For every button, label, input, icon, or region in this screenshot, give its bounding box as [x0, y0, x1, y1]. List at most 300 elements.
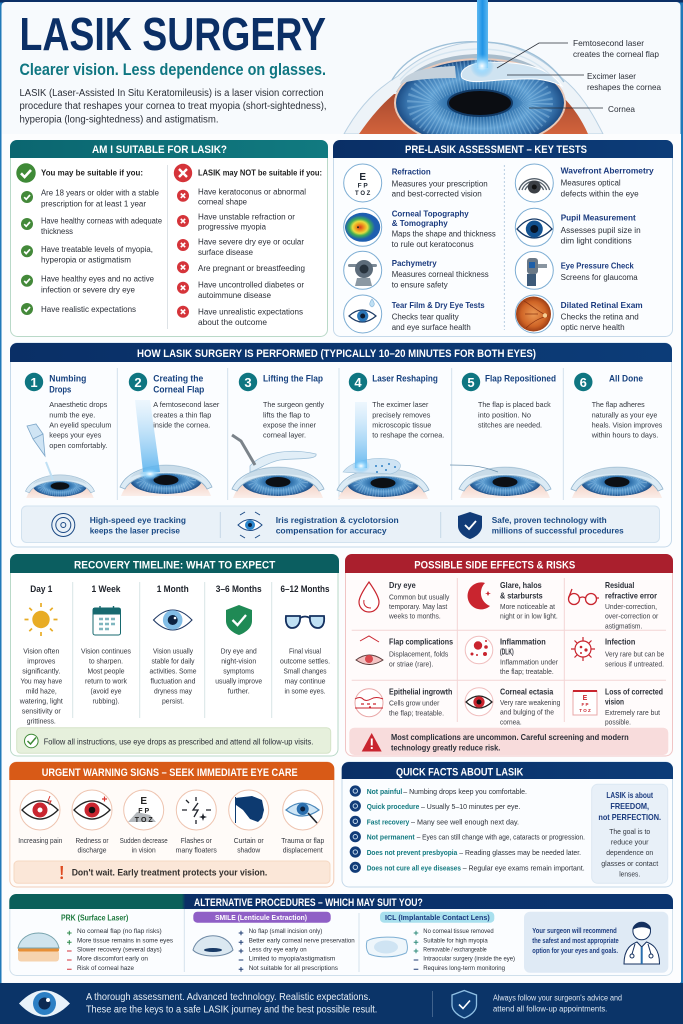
risk: corneal ectasia: [465, 688, 560, 726]
column: 6-12 months: [280, 583, 330, 696]
column: 1 week: 1 Week: [92, 583, 121, 594]
hero illustration: eye with laser: [344, 0, 603, 148]
step 3: corneal layer.: [263, 431, 306, 440]
fact list: Does not cure all eye diseases: [367, 863, 461, 872]
test text: left column: Measures corneal thickness: [392, 270, 489, 279]
heading: PRE-LASIK ASSESSMENT – KEY TESTS: [405, 144, 587, 156]
risk: inflammation: Inflammation under: [500, 657, 558, 666]
sign: redness: Redness or: [76, 836, 109, 845]
risk: loss of corrected vision: vision: [605, 697, 624, 706]
fact list: Not permanent: [367, 833, 415, 842]
callout: surgeon recommendation: the safest and most appropriate: [532, 936, 619, 945]
column: suitable: You may be suitable if you:: [41, 168, 143, 178]
test text: right column: Assesses pupil size in: [561, 226, 641, 235]
fact list: [350, 785, 585, 873]
test text: right column: optic nerve health: [561, 323, 625, 332]
step 3: Lifting the Flap: [263, 372, 323, 384]
title: LASIK SURGERY: [20, 8, 326, 60]
procedure: ICL: No corneal tissue removed: [423, 928, 494, 935]
step 6: The flap adheres: [592, 400, 645, 409]
sign: trauma: Trauma or flap: [281, 836, 324, 845]
procedure: ICL: Removable / exchangeable: [423, 946, 487, 954]
footer message: [86, 992, 377, 1016]
eye illustration: [120, 464, 212, 496]
icon: doctor: [624, 922, 660, 964]
procedure: SMILE: Less dry eye early on: [249, 946, 307, 954]
feature band: compensation for accuracy: [276, 526, 387, 536]
column: not suitable: Are pregnant or breastfeeding: [198, 264, 305, 273]
hero annotations: [497, 39, 661, 114]
eye illustration: [26, 474, 94, 498]
icon: target: [52, 514, 75, 536]
panel: am I suitable: [10, 140, 328, 336]
risk: loss of corrected vision: possible.: [605, 718, 631, 727]
column: day 1: mild haze,: [26, 687, 57, 696]
heading: URGENT WARNING SIGNS – SEEK IMMEDIATE EYE CARE: [42, 767, 298, 779]
hero annotations: Femtosecond laser: [573, 39, 644, 48]
risk: loss of corrected vision: Extremely rare but: [605, 708, 661, 717]
fact list: – Numbing drops keep you comfortable.: [403, 787, 527, 796]
sign: decreased vision: E: [140, 796, 147, 807]
footer note: attend all follow-up appointments.: [493, 1004, 607, 1013]
column: suitable: infection or severe dry eye: [41, 285, 136, 294]
hero annotations: Cornea: [608, 105, 635, 114]
sign: flashes: Flashes or: [181, 836, 212, 845]
procedure: SMILE: No flap (small incision only): [249, 928, 322, 935]
callout: complications note: [349, 728, 668, 755]
hero annotations: creates the corneal flap: [573, 50, 659, 59]
panel: recovery timeline: [10, 554, 339, 756]
icon: eye chart: [344, 164, 382, 202]
procedure: PRK: Slower recovery (several days): [77, 946, 162, 954]
step 6: All Done: [609, 372, 643, 384]
step 1: An eyelid speculum: [49, 420, 111, 429]
column: day 1: improves: [27, 657, 56, 666]
column: day 1: [19, 583, 63, 726]
test text: left column: Tear Film & Dry Eye Tests: [392, 301, 485, 310]
column: 1 month: stable for daily: [152, 657, 195, 666]
test text: right column: Dilated Retinal Exam: [561, 301, 643, 310]
footer note: [493, 994, 622, 1013]
header: title and intro: [20, 8, 326, 126]
subtitle: Clearer vision. Less dependence on glasses.: [20, 61, 326, 79]
procedure: ICL: Requires long-term monitoring: [423, 965, 505, 972]
step 1: open comfortably.: [49, 441, 107, 450]
callout: freedom not perfection: LASIK is about: [606, 791, 653, 800]
risk: flap complications: Displacement, folds: [389, 650, 448, 659]
column: not suitable: Have unrealistic expectations: [198, 308, 303, 317]
column: not suitable: autoimmune disease: [198, 291, 272, 300]
icon: footer shield: [452, 990, 476, 1018]
column: 3-6 months: symptoms: [223, 667, 254, 676]
fact list: Not painful: [367, 787, 402, 796]
step 4: Laser Reshaping: [372, 372, 438, 384]
column: suitable: hyperopia or astigmatism: [41, 256, 131, 265]
icon: retina: [515, 295, 553, 333]
heading: QUICK FACTS ABOUT LASIK: [396, 766, 524, 778]
feature band: millions of successful procedures: [492, 526, 624, 536]
step 5: 5: [467, 375, 475, 390]
column: 1 week: Vision continues: [81, 647, 131, 656]
intro text: procedure that reshapes your cornea to treat myopia (short-sightedness),: [20, 101, 326, 112]
icon: forceps: [232, 435, 255, 465]
procedure: SMILE: SMILE (Lenticule Extraction): [215, 913, 307, 922]
feature band: High-speed eye tracking: [90, 515, 186, 525]
heading: HOW LASIK SURGERY IS PERFORMED (TYPICALLY 10–20 MINUTES FOR BOTH EYES): [137, 348, 536, 360]
risk: loss of corrected vision: T O Z: [579, 708, 591, 713]
icon: footer eye: [19, 990, 70, 1017]
test text: right column: Pupil Measurement: [561, 214, 636, 223]
risk: corneal ectasia: Very rare weakening: [500, 698, 560, 707]
procedure: PRK: Risk of corneal haze: [77, 965, 134, 972]
eye illustration: [232, 466, 324, 498]
test text: right column: Wavefront Aberrometry: [561, 166, 654, 175]
callout: complications note: technology greatly reduce risk.: [391, 743, 500, 752]
risk: loss of corrected vision: Loss of corrected: [605, 688, 663, 697]
step 1: Anaesthetic drops: [49, 400, 108, 409]
step 6: heals. Vision improves: [592, 420, 663, 429]
procedure: PRK: PRK (Surface Laser): [61, 913, 129, 922]
column: not suitable: LASIK may NOT be suitable if you:: [198, 168, 322, 178]
sign: decreased vision: Sudden decrease: [120, 836, 168, 845]
column: 1 month: [150, 583, 196, 706]
sign: decreased vision: [120, 790, 168, 854]
panel: quick facts: [342, 762, 673, 887]
panel: side effects and risks: [345, 554, 673, 756]
sign: decreased vision: F P: [138, 808, 149, 815]
column: 6-12 months: outcome settles.: [280, 657, 330, 666]
callout: freedom not perfection: lenses.: [619, 870, 640, 878]
fact list: – Many see well enough next day.: [411, 817, 519, 826]
test text: right column: Eye Pressure Check: [561, 262, 634, 271]
step 3: The surgeon gently: [263, 400, 324, 409]
icon: SMILE lenticule: [193, 936, 233, 956]
callout: freedom not perfection: dependence on: [606, 848, 653, 857]
step 1: 1: [30, 375, 38, 390]
step 1: Numbing: [49, 372, 87, 384]
risk: inflammation: the flap; treatable.: [500, 667, 554, 676]
procedure: ICL: Intraocular surgery (inside the eye): [423, 956, 515, 962]
panel: urgent warning signs: [9, 762, 334, 887]
column: day 1: significantly.: [22, 667, 60, 676]
column: not suitable: about the outcome: [198, 318, 268, 327]
sign: curtain: [229, 790, 269, 854]
risk: inflammation: (DLK): [500, 647, 514, 656]
column: 3-6 months: Dry eye and: [221, 647, 257, 656]
risk: infection: [571, 637, 664, 668]
risk: flap complications: [356, 636, 453, 668]
callout: freedom not perfection: [592, 784, 668, 883]
intro text: [20, 88, 326, 126]
column: suitable: Have healthy corneas with adequate: [41, 217, 163, 226]
test text: right column: Checks the retina and: [561, 313, 639, 322]
test text: right column: defects within the eye: [561, 190, 639, 199]
step 2: [120, 372, 220, 496]
column: 6-12 months: Final visual: [289, 647, 321, 656]
procedure: ICL: Suitable for high myopia: [423, 938, 488, 944]
column: day 1: You may have: [20, 677, 62, 686]
risk: epithelial ingrowth: [355, 688, 452, 717]
column: 1 month: 1 Month: [157, 583, 189, 594]
risk: loss of corrected vision: [573, 688, 663, 727]
risk: corneal ectasia: cornea.: [500, 717, 522, 726]
risk: residual refractive error: astigmatism.: [605, 622, 642, 631]
panel: how LASIK is performed: [10, 343, 672, 547]
heading: AM I SUITABLE FOR LASIK?: [92, 144, 227, 156]
test text: left column: Checks tear quality: [392, 313, 459, 322]
icon: eye chart: F P: [358, 182, 368, 190]
callout: surgeon recommendation: option for your eyes and goals.: [532, 946, 618, 955]
callout: follow instructions: Follow all instructions, use eye drops as prescribed and attend all follow-up visits.: [44, 737, 313, 746]
column: 3-6 months: usually improve: [215, 677, 262, 686]
icon: sun: [24, 603, 58, 636]
risk: residual refractive error: over-correction or: [605, 612, 659, 621]
column: suitable: prescription for at least 1 year: [41, 199, 146, 208]
fact list: Quick procedure: [367, 802, 419, 811]
risk: glare: More noticeable at: [500, 602, 556, 611]
sign: trauma: displacement: [283, 845, 323, 854]
feature band: keeps the laser precise: [90, 526, 180, 536]
sign: decreased vision: T O Z: [135, 817, 153, 824]
test text: right column: [561, 166, 654, 332]
test text: left column: Refraction: [392, 168, 431, 177]
icon: calendar: [93, 606, 120, 635]
step 4: microscopic tissue: [372, 420, 431, 429]
risk: dry eye: weeks to months.: [388, 612, 441, 621]
step 1: keeps your eyes: [49, 431, 102, 440]
column: suitable: [16, 163, 163, 315]
risk: glare: Glare, halos: [500, 581, 542, 590]
callout: don't wait: [14, 861, 330, 883]
column: 1 month: persist.: [162, 697, 184, 706]
icon: eye chart: E: [359, 172, 366, 183]
step 3: expose the inner: [263, 420, 317, 429]
column: not suitable: surface disease: [198, 248, 254, 257]
risk: dry eye: [359, 581, 449, 621]
heading: POSSIBLE SIDE EFFECTS & RISKS: [414, 560, 576, 572]
test text: right column: Screens for glaucoma: [561, 273, 638, 282]
column: 1 month: fluctuation and: [150, 677, 196, 686]
column: 1 month: dryness may: [154, 687, 192, 696]
sign: decreased vision: in vision: [132, 845, 156, 854]
icon: eye drop bottle: [27, 424, 45, 456]
feature band: Iris registration & cyclotorsion: [276, 515, 399, 525]
test text: left column: Maps the shape and thickness: [392, 230, 496, 239]
procedure: PRK: No corneal flap (no flap risks): [77, 928, 162, 935]
procedure: PRK: More discomfort early on: [77, 956, 148, 962]
fact list: – Usually 5–10 minutes per eye.: [421, 802, 520, 811]
step 5: Flap Repositioned: [485, 372, 556, 384]
step 1: [25, 372, 111, 498]
sign: flashes: many floaters: [176, 845, 217, 854]
risk: infection: serious if untreated.: [605, 659, 664, 668]
risk: epithelial ingrowth: Epithelial ingrowth: [389, 688, 452, 697]
heading: ALTERNATIVE PROCEDURES – WHICH MAY SUIT YOU?: [194, 897, 423, 909]
panel: pre-LASIK assessment: [333, 140, 673, 336]
step 4: to reshape the cornea.: [372, 431, 444, 440]
procedure: SMILE: Not suitable for all prescriptions: [249, 965, 339, 972]
column: 6-12 months: in some eyes.: [284, 687, 326, 696]
column: day 1: Day 1: [30, 583, 52, 594]
callout: freedom not perfection: FREEDOM,: [610, 802, 649, 811]
step 5: stitches are needed.: [478, 420, 542, 429]
procedure: SMILE: [193, 912, 355, 972]
callout: freedom not perfection: not PERFECTION.: [598, 813, 661, 822]
column: 1 week: [81, 583, 131, 706]
sign: curtain: shadow: [237, 845, 261, 854]
icon: pupil measurement: [515, 208, 553, 246]
step 4: The excimer laser: [372, 400, 429, 409]
column: 6-12 months: Small changes: [284, 667, 327, 676]
risk: corneal ectasia: and bulging of the: [500, 708, 554, 717]
callout: freedom not perfection: reduce your: [611, 838, 649, 846]
procedure: PRK: [18, 913, 174, 972]
step 2: A femtosecond laser: [153, 400, 220, 409]
icon: wavefront: [515, 164, 553, 202]
step 6: [571, 372, 663, 498]
risk: residual refractive error: [568, 581, 659, 631]
column: 3-6 months: further.: [228, 687, 250, 696]
icon: glasses: [286, 616, 324, 628]
step 6: naturally as your eye: [592, 410, 657, 419]
risk: infection: Infection: [605, 637, 635, 646]
procedure: SMILE: Better early corneal nerve preservation: [249, 938, 355, 944]
callout: surgeon recommendation: Your surgeon will recommend: [532, 926, 617, 935]
column: day 1: grittiness.: [27, 717, 56, 726]
icon: ICL lens: [366, 937, 408, 957]
column: day 1: watering, light: [19, 697, 63, 706]
step 3: 3: [244, 375, 252, 390]
risk: loss of corrected vision: E: [583, 695, 588, 702]
footer message: A thorough assessment. Advanced technology. Realistic expectations.: [86, 992, 371, 1003]
risk: glare: night or in low light.: [500, 612, 558, 621]
column: day 1: sensitivity or: [22, 707, 61, 716]
test text: left column: Corneal Topography: [392, 209, 469, 218]
column: 3-6 months: night-vision: [221, 657, 256, 666]
step 3: [232, 372, 324, 498]
sign: increasing pain: [18, 790, 62, 845]
procedure: ICL: [366, 912, 515, 972]
risk: flap complications: or striae (rare).: [389, 659, 433, 668]
test text: left column: Measures your prescription: [392, 179, 488, 188]
fact list: – Regular eye exams remain important.: [463, 863, 585, 872]
risk: inflammation: [465, 636, 558, 676]
fact list: – Eyes can still change with age, cataracts or progression.: [417, 833, 585, 842]
procedure: ICL: ICL (Implantable Contact Lens): [385, 913, 490, 922]
step 1: Drops: [49, 384, 71, 394]
step 6: within hours to days.: [591, 431, 658, 440]
column: not suitable: Have severe dry eye or ocular: [198, 238, 304, 247]
column: not suitable: corneal shape: [198, 198, 248, 207]
test text: left column: and eye surface health: [392, 323, 471, 332]
step 2: Creating the: [153, 372, 203, 384]
footer message: These are the keys to a safe LASIK journey and the best possible result.: [86, 1005, 377, 1016]
risk: loss of corrected vision: F P: [581, 702, 589, 707]
risk: infection: Very rare but can be: [605, 650, 664, 659]
column: suitable: Have treatable levels of myopia,: [41, 245, 153, 254]
column: not suitable: Have unstable refraction or: [198, 212, 295, 221]
column: not suitable: Have uncontrolled diabetes or: [198, 281, 304, 290]
column: suitable: thickness: [41, 227, 73, 236]
step 5: The flap is placed back: [478, 400, 551, 409]
icon: PRK cornea: [18, 933, 59, 962]
step 2: Corneal Flap: [153, 384, 205, 394]
column: not suitable: Have keratoconus or abnormal: [198, 187, 306, 196]
callout: follow instructions: [17, 728, 331, 753]
icon: tonometer: [515, 251, 553, 289]
risk: epithelial ingrowth: Cells grow under: [389, 698, 440, 707]
callout: complications note: Most complications are uncommon. Careful screening and modern: [391, 733, 629, 742]
icon: eye chart: T O Z: [355, 191, 371, 197]
column: 6-12 months: 6–12 Months: [280, 583, 330, 594]
risk: flap complications: Flap complications: [389, 637, 453, 646]
step 2: inside the cornea.: [153, 420, 210, 429]
risk: residual refractive error: refractive error: [605, 591, 658, 600]
step 6: 6: [580, 375, 587, 390]
icon: eye: [154, 610, 192, 630]
step 3: lifts the flap to: [263, 410, 310, 419]
icon: green shield: [226, 605, 252, 635]
panel: alternative procedures: [9, 894, 673, 976]
callout: don't wait: Don't wait. Early treatment protects your vision.: [72, 868, 267, 878]
risk: glare: [468, 581, 558, 621]
step 4: [337, 372, 444, 499]
step 5: [450, 372, 556, 498]
step 4: precisely removes: [372, 410, 431, 419]
callout: freedom not perfection: glasses or contact: [601, 859, 658, 868]
sign: redness: [72, 790, 112, 854]
feature band: [22, 506, 660, 542]
column: suitable: Are 18 years or older with a stable: [41, 189, 160, 198]
icon: tear film: [344, 295, 382, 333]
footer note: Always follow your surgeon's advice and: [493, 994, 622, 1003]
column: suitable: Have healthy eyes and no active: [41, 275, 155, 284]
procedure: SMILE: Limited to myopia/astigmatism: [249, 956, 336, 962]
fact list: Fast recovery: [367, 817, 409, 826]
test text: left column: and best-corrected vision: [392, 190, 482, 199]
eye illustration: [571, 466, 663, 498]
step 1: numb the eye.: [49, 410, 95, 419]
test text: right column: dim light conditions: [561, 237, 632, 246]
column: 1 week: rubbing).: [92, 697, 120, 706]
callout: freedom not perfection: The goal is to: [609, 827, 650, 836]
icon: topography map: [344, 208, 382, 246]
icon: shield: [458, 512, 482, 539]
feature band: Safe, proven technology with: [492, 515, 607, 525]
procedure: PRK: More tissue remains in some eyes: [77, 938, 174, 944]
sign: flashes: [176, 790, 217, 854]
test text: left column: Pachymetry: [392, 259, 437, 268]
risk: residual refractive error: Residual: [605, 581, 634, 590]
risk: residual refractive error: Under-correction,: [605, 602, 657, 611]
column: 1 week: to sharpen.: [89, 657, 123, 666]
risk: dry eye: temporary. May last: [389, 602, 448, 611]
test text: left column: & Tomography: [392, 219, 448, 228]
column: day 1: Vision often: [23, 647, 59, 656]
sign: redness: discharge: [78, 845, 106, 854]
icon: tracked eye: [238, 512, 262, 538]
fact list: – Reading glasses may be needed later.: [459, 848, 581, 857]
column: 1 week: Most people: [88, 667, 124, 676]
sign: curtain: Curtain or: [234, 836, 264, 845]
step 5: into position. No: [478, 410, 531, 419]
column: not suitable: progressive myopia: [198, 223, 267, 232]
test text: left column: to rule out keratoconus: [392, 240, 474, 249]
column: 6-12 months: may continue: [284, 677, 326, 686]
intro text: hyperopia (long-sightedness) and astigmatism.: [20, 114, 218, 126]
hero annotations: reshapes the cornea: [587, 83, 661, 92]
hero annotations: Excimer laser: [587, 72, 636, 81]
